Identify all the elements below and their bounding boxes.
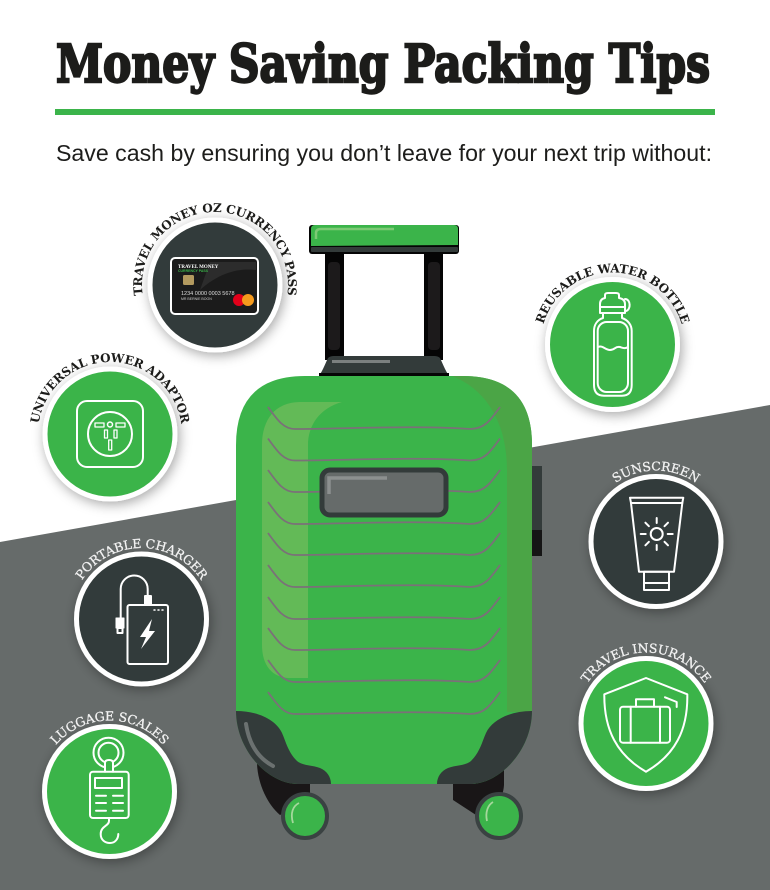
right side shade (452, 376, 532, 712)
icon: bank card: TRAVEL MONEY (178, 265, 219, 270)
curved label: SUNSCREEN (612, 461, 701, 482)
wheel housings (257, 764, 504, 815)
curved label: UNIVERSAL POWER ADAPTOR (30, 352, 190, 424)
icon: shield with suitcase (604, 678, 687, 772)
icon: bank card: CURRENCY PASS (178, 269, 209, 273)
icon: bank card: MR BERNIE BOON (181, 297, 212, 301)
curved label: PORTABLE CHARGER (74, 538, 207, 581)
curved label: TRAVEL MONEY OZ CURRENCY PASS (133, 203, 297, 296)
telescopic handle (309, 225, 459, 376)
badge: luggage scales (40, 711, 183, 866)
badge: universal power adaptor (30, 352, 190, 512)
icon: bank card: 1234 0000 0003 5678 (181, 291, 235, 297)
badge: travel insurance (576, 643, 720, 798)
suitcase illustration (236, 225, 542, 838)
icon: power bank (116, 576, 168, 664)
corner bumpers (236, 711, 532, 784)
badge: portable charger (72, 538, 215, 694)
left highlight (262, 402, 342, 678)
subtitle: Save cash by ensuring you don’t leave for your next trip without: (56, 140, 712, 166)
icon: sunscreen tube (630, 498, 683, 590)
badge: reusable water bottle (535, 264, 690, 422)
title underline (55, 109, 715, 115)
suitcase body (236, 376, 532, 784)
curved label: TRAVEL INSURANCE (580, 643, 712, 683)
luggage tag window (322, 470, 446, 515)
background: grey diagonal panel (0, 405, 770, 890)
side handle (531, 466, 542, 556)
curved label: REUSABLE WATER BOTTLE (535, 264, 690, 324)
icon: bank card (171, 258, 258, 314)
curved label: LUGGAGE SCALES (49, 711, 169, 745)
icon: power socket (77, 401, 143, 467)
badge: travel money oz currency pass (133, 203, 297, 363)
icon: hanging scale (90, 738, 129, 843)
wheels (283, 794, 521, 838)
icon: water bottle (594, 293, 632, 396)
badge: sunscreen (586, 461, 730, 616)
ribs (268, 407, 500, 714)
